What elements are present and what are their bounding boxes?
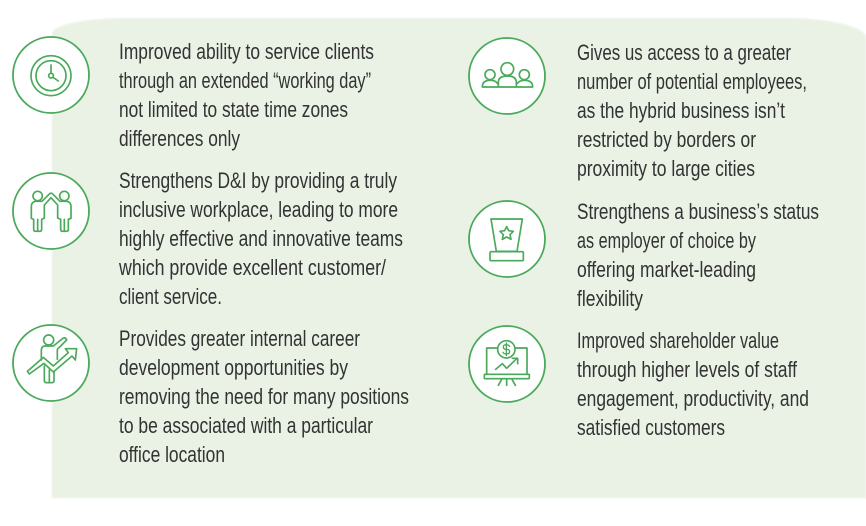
text: shareholder value: Improved shareholder value <box>577 328 779 353</box>
text: shareholder value: engagement, productivity, and <box>577 386 809 411</box>
text: career development: to be associated with a particular <box>119 413 373 438</box>
text: career development <box>119 326 409 467</box>
text: shareholder value: through higher levels of staff <box>577 357 798 382</box>
text: employer of choice: flexibility <box>577 286 643 311</box>
text: improved service <box>119 39 374 151</box>
icon: presentation with dollar <box>469 326 545 402</box>
icon: group of people <box>469 38 545 114</box>
text: improved service: differences only <box>119 126 240 151</box>
text: employer of choice: offering market-leading <box>577 257 756 282</box>
text: improved service: Improved ability to service clients <box>119 39 374 64</box>
text: D&I <box>118 168 403 309</box>
text: D&I: which provide excellent customer/ <box>118 255 387 280</box>
icon: trophy with star <box>469 201 545 277</box>
text: shareholder value: satisfied customers <box>577 415 725 440</box>
icon: people high five <box>13 173 89 249</box>
text: D&I: client service. <box>119 284 222 309</box>
text: improved service: not limited to state time zones <box>119 97 348 122</box>
text: career development: development opportunities by <box>119 355 348 380</box>
text: career development: office location <box>119 442 225 467</box>
icon: clock <box>13 37 89 113</box>
text: potential employees: Gives us access to a greater <box>577 40 791 65</box>
text: potential employees: restricted by borders or <box>577 127 756 152</box>
text: employer of choice: as employer of choice by <box>577 228 756 253</box>
text: D&I: inclusive workplace, leading to more <box>119 197 398 222</box>
text: D&I: Strengthens D&I by providing a truly <box>119 168 397 193</box>
text: potential employees <box>577 40 807 181</box>
icon: career growth <box>13 325 89 401</box>
text: potential employees: proximity to large cities <box>577 156 755 181</box>
text: career development: removing the need for many positions <box>119 384 409 409</box>
text: shareholder value <box>577 328 809 440</box>
text: career development: Provides greater internal career <box>119 326 360 351</box>
text: potential employees: as the hybrid business isn’t <box>577 98 785 123</box>
text: employer of choice <box>577 199 819 311</box>
text: D&I: highly effective and innovative teams <box>119 226 403 251</box>
text: improved service: through an extended “working day” <box>119 68 371 93</box>
